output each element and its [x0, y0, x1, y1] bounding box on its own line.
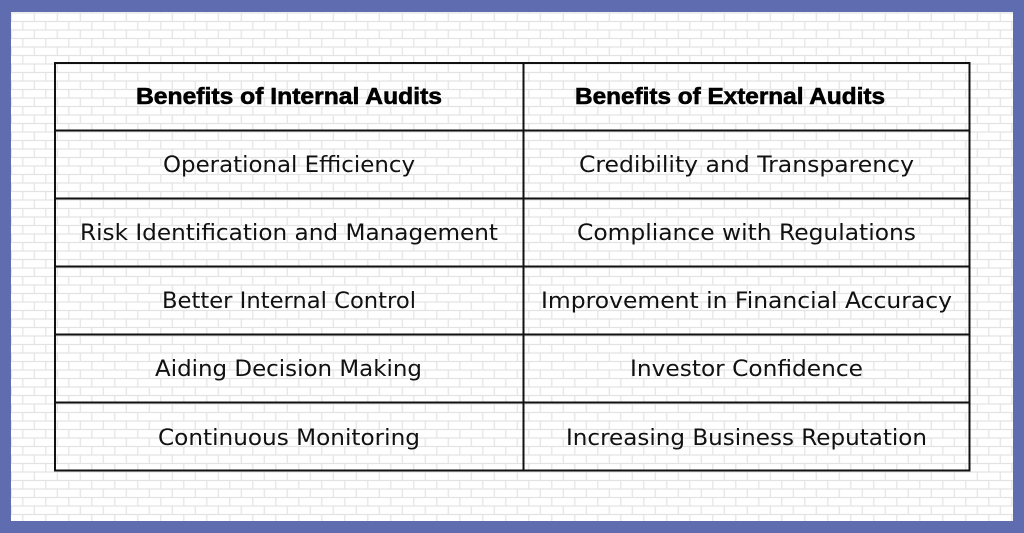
internal benefit 5: Continuous Monitoring [158, 426, 420, 451]
table grid [54, 62, 970, 472]
external benefit 5: Increasing Business Reputation [566, 426, 927, 451]
internal benefit 1: Operational Efficiency [163, 153, 415, 178]
internal benefit 2: Risk Identification and Management [80, 221, 498, 246]
heading: internal audits: Benefits of Internal Audits [136, 83, 442, 109]
internal benefit 4: Aiding Decision Making [155, 357, 422, 382]
external benefit 4: Investor Confidence [630, 357, 863, 382]
external benefit 2: Compliance with Regulations [577, 221, 916, 246]
heading: external audits: Benefits of External Audits [575, 83, 885, 109]
external benefit 3: Improvement in Financial Accuracy [541, 289, 952, 314]
internal benefit 3: Better Internal Control [162, 289, 416, 314]
table [54, 62, 970, 472]
external benefit 1: Credibility and Transparency [579, 153, 914, 178]
